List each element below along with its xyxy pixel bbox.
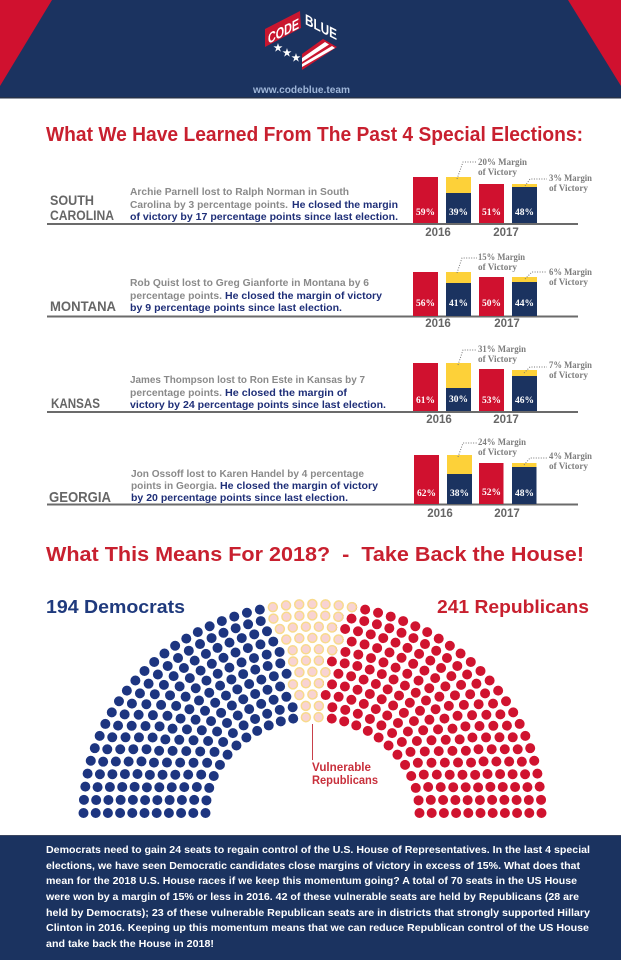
logo: Code Blue: ★ [283,48,292,59]
state label: GEORGIA [49,489,111,506]
callouts: margin of victory: of Victory [478,447,517,457]
description: He closed the margin of [225,387,348,399]
bar chart: 2016 [426,414,452,426]
state label: SOUTH [50,193,94,208]
callouts: margin of victory: 4% Margin [549,451,592,461]
footer paragraph [45,844,590,950]
row: Kansas [47,344,592,426]
bar chart: 2017 [494,508,520,520]
heading: past special elections: What We Have Learned From The Past 4 Special Elections: [46,123,583,146]
callouts: margin of victory: of Victory [549,277,588,287]
state label: KANSAS [51,396,100,411]
Republican seats [84,604,542,813]
bar chart [413,177,537,239]
description: Carolina by 3 percentage points. [130,199,288,211]
callouts: margin of victory [458,437,592,471]
description: points in Georgia. [131,480,217,492]
heading: what this means for 2018: What This Means For 2018? - Take Back the House! [46,543,584,566]
callouts: margin of victory: 31% Margin [478,344,526,354]
bar chart: 2017 [494,318,520,330]
callouts: margin of victory: 3% Margin [549,173,592,183]
logo: Code Blue [265,11,337,70]
footer paragraph: held by Democrats); 23 of these vulnerable Republican seats are in districts that strongly supported Hillary [46,907,590,919]
Democratic seats [84,604,542,813]
footer paragraph: Clinton in 2016. Keeping up this momentum means that we can reduce Republican control of the US House [46,922,589,934]
website url: www.codeblue.team [252,84,350,96]
bar chart: 2016 [425,227,451,239]
callouts: margin of victory: 20% Margin [478,157,527,167]
row: Georgia [47,437,592,520]
bar chart: 48% [515,489,534,499]
footer paragraph: Democrats need to gain 24 seats to regain control of the U.S. House of Representatives. In the last 4 special [46,844,590,856]
callouts: margin of victory [457,157,592,193]
label: 241 Republicans: 241 Republicans [437,596,589,617]
bar chart [413,363,537,426]
description: by 9 percentage points since last election. [130,302,342,314]
callout: vulnerable Republicans: Vulnerable [312,762,371,774]
bar chart: 46% [515,396,534,406]
callouts: margin of victory: of Victory [549,370,588,380]
bar chart: 56% [416,299,435,309]
bar chart: 59% [416,208,435,218]
description: Jon Ossoff lost to Karen Handel by 4 percentage [131,468,364,480]
vulnerable Republican seats: pink centre [84,604,542,813]
logo: Code Blue: CODE [268,16,299,48]
bar chart: 39% [449,208,468,218]
callouts: margin of victory: 15% Margin [478,252,525,262]
description [130,277,382,314]
row: South Carolina [47,157,592,239]
bar chart: 41% [449,299,468,309]
callouts: margin of victory: 6% Margin [549,267,592,277]
footer panel [0,835,621,960]
label: 194 Democrats: 194 Democrats [46,596,185,617]
state label [50,193,114,223]
description: Rob Quist lost to Greg Gianforte in Montana by 6 [130,277,369,289]
state label: MONTANA [50,299,116,314]
callouts: margin of victory: of Victory [478,167,517,177]
bar chart: 51% [482,208,501,218]
logo: Code Blue: ★ [274,43,283,54]
header banner [0,0,621,98]
description [131,468,378,504]
description: victory by 24 percentage points since last election. [130,399,386,411]
bar chart: 44% [515,299,534,309]
callouts: margin of victory: of Victory [549,461,588,471]
bar chart: 30% [449,395,468,405]
bar chart: 61% [416,396,435,406]
vulnerable Republican seats: yellow ring [84,604,542,813]
callouts: margin of victory: of Victory [478,262,517,272]
bar chart [414,455,536,520]
description: by 20 percentage points since last election. [131,492,348,504]
description: James Thompson lost to Ron Este in Kansas by 7 [130,374,365,386]
footer paragraph: and take back the House in 2018! [46,938,214,950]
callout: vulnerable Republicans: Republicans [312,775,378,787]
description: He closed the margin of victory [225,290,382,302]
description: Archie Parnell lost to Ralph Norman in South [130,186,349,198]
description [130,374,386,411]
description: He closed the margin of victory [220,480,378,492]
bar chart: 50% [482,299,501,309]
footer paragraph: mean for the 2018 U.S. House races if we keep this momentum going? A total of 70 seats in the US House [46,875,577,887]
bar chart: 2017 [493,414,519,426]
bar chart: 2016 [425,318,451,330]
bar chart: 2016 [427,508,453,520]
state label: CAROLINA [50,208,114,223]
description: of victory by 17 percentage points since last election. [130,211,398,223]
bar chart: 62% [417,489,436,499]
footer paragraph: elections, we have seen Democratic candidates close margins of victory in excess of 15%. What does that [46,860,580,872]
row: Montana [47,252,592,330]
callouts: margin of victory [458,344,592,380]
bar chart [413,272,537,330]
callouts: margin of victory: 24% Margin [478,437,526,447]
description: He closed the margin [292,199,398,211]
callout: vulnerable Republicans [312,724,378,787]
logo: Code Blue: ★ [292,53,301,64]
description [130,186,398,223]
bar chart: 52% [482,488,501,498]
callouts: margin of victory: 7% Margin [549,360,592,370]
bar chart: 53% [482,396,501,406]
bar chart: 2017 [493,227,519,239]
description: percentage points. [130,387,222,399]
chart: House seats hemicycle [84,604,542,813]
description: percentage points. [130,290,222,302]
bar chart: 48% [515,208,534,218]
callouts: margin of victory: of Victory [549,183,588,193]
footer paragraph: were won by a margin of 15% or less in 2016. 42 of these vulnerable seats are held by Republicans (28 are [45,891,579,903]
bar chart: 38% [450,489,469,499]
logo: Code Blue: BLUE [305,12,337,44]
callouts: margin of victory: of Victory [478,354,517,364]
callouts: margin of victory [457,252,592,287]
